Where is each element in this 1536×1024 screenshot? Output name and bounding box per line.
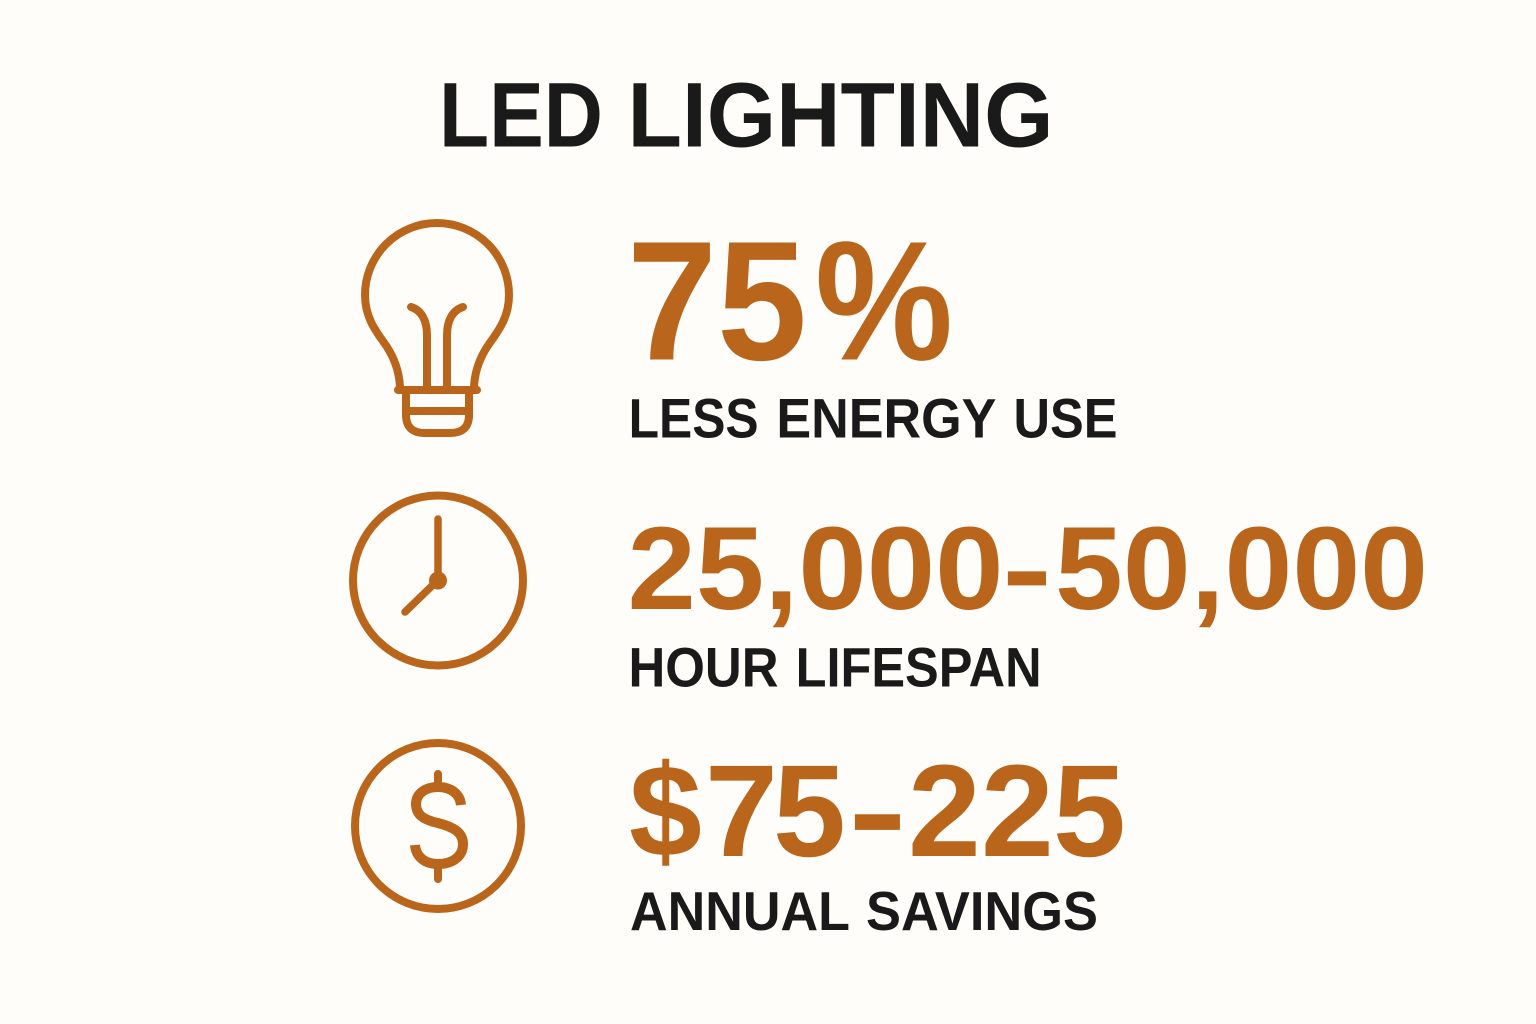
stat: $75-225: $75 (629, 737, 846, 884)
row: savings (355, 737, 1126, 942)
stat: 25,000-50,000: - (1002, 503, 1052, 635)
title (439, 65, 1054, 167)
label: hour lifespan (628, 637, 1042, 699)
label: hour lifespan: LIFESPAN (796, 637, 1042, 699)
icon: clock (353, 496, 523, 666)
label: annual savings (630, 880, 1098, 942)
label: less energy use: ENERGY (776, 387, 996, 449)
icon: dollar coin (355, 743, 521, 909)
row: energy use (365, 206, 1118, 449)
icon: light bulb (365, 223, 509, 433)
stat: $75-225: 225 (908, 737, 1126, 884)
title: LIGHTING (628, 65, 1054, 167)
label: less energy use: LESS (629, 387, 759, 449)
stat: 25,000-50,000: 50,000 (1055, 503, 1428, 635)
stat: 75% (627, 206, 953, 396)
label: less energy use: USE (1014, 387, 1118, 449)
stat: 75%: 75 (627, 206, 807, 396)
stat: 25,000-50,000 (628, 503, 1428, 635)
label: hour lifespan: HOUR (628, 637, 778, 699)
label: annual savings: ANNUAL (630, 880, 850, 942)
label: less energy use (629, 387, 1118, 449)
stat: 25,000-50,000: 25,000 (628, 503, 1004, 635)
stat: 75%: % (815, 206, 953, 396)
row: lifespan (353, 496, 1428, 699)
label: annual savings: SAVINGS (866, 880, 1098, 942)
title: LED (439, 65, 603, 167)
stat: $75-225 (629, 737, 1126, 884)
stat: $75-225: - (848, 737, 907, 884)
